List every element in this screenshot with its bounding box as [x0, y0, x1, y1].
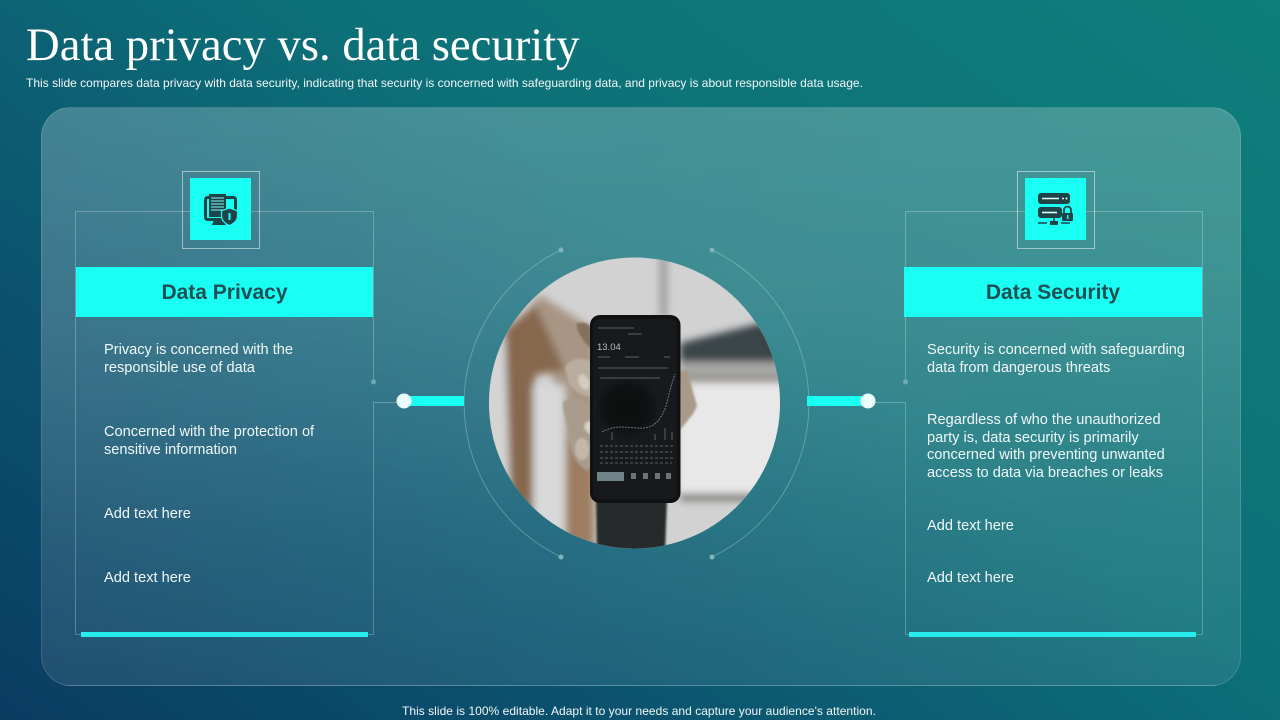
title: Data privacy vs. data security: [26, 19, 580, 71]
footer note: This slide is 100% editable. Adapt it to your needs and capture your audience's attention.: [402, 704, 876, 718]
icon: data privacy: [182, 172, 260, 248]
left text block: Add text here: [104, 506, 191, 522]
right text block: Security is concerned with safeguarding: [927, 342, 1185, 358]
right text block: Regardless of who the unauthorized: [927, 412, 1161, 428]
central photo: hand holding phone: 13.04: [597, 342, 621, 353]
left text block: Concerned with the protection of: [104, 424, 314, 440]
left connector: [396, 394, 464, 408]
main panel: [41, 107, 1241, 686]
right text block: Add text here: [927, 518, 1014, 534]
right text block: Add text here: [927, 570, 1014, 586]
left column heading: [76, 267, 373, 317]
icon: data security: [1018, 172, 1094, 248]
frames, arcs and connectors: [75, 171, 1203, 637]
decorative arcs: [464, 248, 809, 560]
bottom accent bars: [81, 632, 1196, 637]
hand: [563, 323, 697, 471]
left text block: sensitive information: [104, 442, 237, 458]
left frame: [76, 212, 404, 634]
left text block: Privacy is concerned with the: [104, 342, 293, 358]
left text block: responsible use of data: [104, 360, 255, 376]
subtitle: This slide compares data privacy with data security, indicating that security is concerned with safeguarding data, and privacy is about responsible data usage.: [26, 76, 863, 90]
phone: [590, 315, 680, 503]
central photo: hand holding phone: [485, 255, 785, 560]
right text block: access to data via breaches or leaks: [927, 465, 1163, 481]
right frame: [868, 212, 1202, 634]
right column heading: [904, 267, 1202, 317]
right column heading: Data Security: [986, 281, 1120, 304]
right text block: data from dangerous threats: [927, 360, 1110, 376]
backdrop left: [489, 336, 515, 486]
right text block: [927, 342, 1185, 586]
right text block: party is, data security is primarily: [927, 430, 1139, 446]
right text block: concerned with preventing unwanted: [927, 447, 1165, 463]
left text block: Add text here: [104, 570, 191, 586]
left column heading: Data Privacy: [161, 281, 288, 304]
left text block: [104, 342, 314, 586]
backdrop right: [660, 255, 667, 317]
right connector: [807, 394, 876, 408]
arm: [596, 500, 667, 552]
